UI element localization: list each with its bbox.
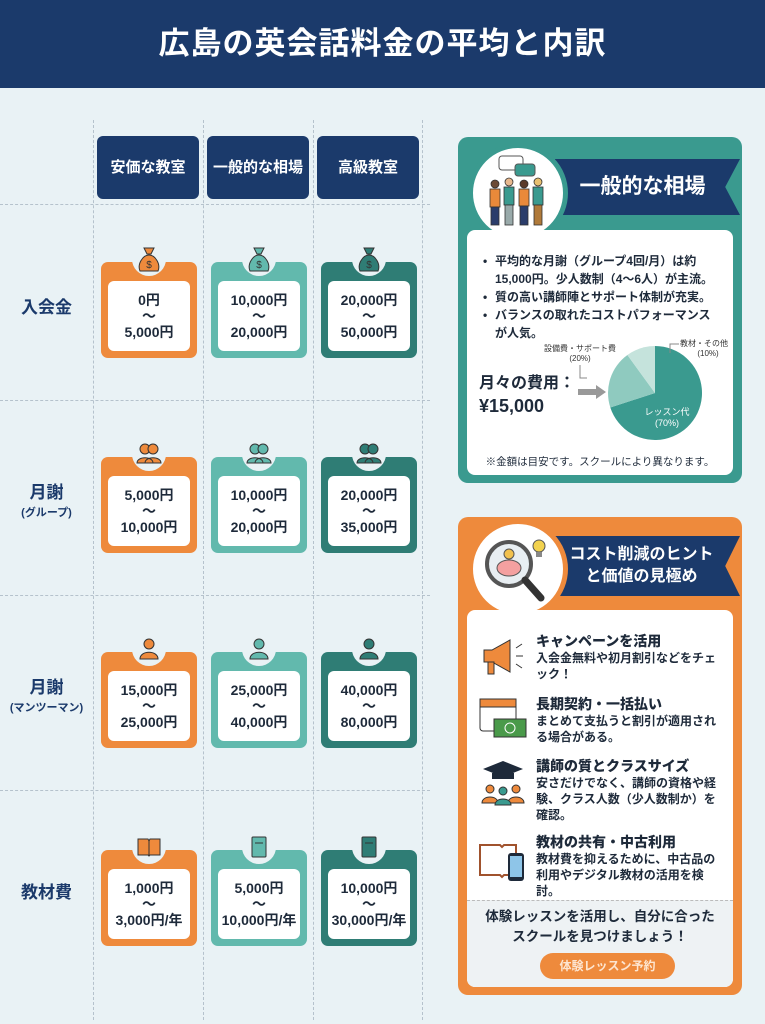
card: admission premium: 〜 (362, 308, 376, 324)
card: admission budget: 〜 (142, 308, 156, 324)
card: materials budget (101, 850, 197, 946)
card: group average: 〜 (252, 503, 266, 519)
bullet list: 15,000円。少人数制（4〜6人）が主流。 (495, 272, 713, 286)
icon: graduation and people (482, 761, 524, 806)
card: materials average: 〜 (252, 896, 266, 912)
monthly cost: ¥15,000 (479, 396, 544, 416)
bullet list: 質の高い講師陣とサポート体制が充実。 (495, 290, 711, 304)
banner: average (555, 159, 740, 215)
tip: long term (480, 696, 716, 744)
row label: group: (グループ) (21, 507, 72, 519)
row label: private: 月謝 (30, 678, 64, 697)
card: private budget (101, 652, 197, 748)
card: materials budget: 3,000円/年 (116, 912, 182, 928)
card: admission average: 〜 (252, 308, 266, 324)
title: 広島の英会話料金の平均と内訳 (158, 26, 606, 61)
panel: average market (458, 137, 742, 483)
row label: group: 月謝 (30, 483, 64, 502)
card: group average: 20,000円 (231, 519, 287, 535)
card: group premium: 〜 (362, 503, 376, 519)
tip: long term: 長期契約・一括払い (536, 696, 662, 712)
tip: materials sharing: 教材の共有・中古利用 (536, 834, 676, 850)
card: materials premium (321, 850, 417, 946)
card: admission premium: $ (366, 260, 372, 271)
tip: teacher quality: 安さだけでなく、講師の資格や経験、クラス人数（少人数制か）を確認。 (536, 776, 716, 822)
bullet list: 平均的な月謝（グループ4回/月）は約 (495, 254, 696, 268)
header: premium: 高級教室 (338, 159, 398, 176)
icon: megaphone (484, 639, 523, 674)
title (0, 0, 765, 88)
call to action area (467, 900, 733, 987)
card: group budget: 〜 (142, 503, 156, 519)
white content box (467, 610, 733, 987)
card: group budget: 5,000円 (124, 487, 174, 503)
tip: teacher quality: 講師の質とクラスサイズ (536, 758, 689, 774)
card: admission average: 20,000円 (231, 324, 287, 340)
banner: tips (555, 536, 740, 596)
icon: book and tablet (479, 844, 524, 881)
card: materials premium: 10,000円 (341, 880, 397, 896)
card: private budget: 〜 (142, 698, 156, 714)
card: admission premium: 20,000円 (341, 292, 397, 308)
icon: people talking (468, 143, 568, 243)
row label: materials: 教材費 (21, 883, 72, 902)
bullet list: バランスの取れたコストパフォーマンス (495, 308, 711, 322)
call to action area: スクールを見つけましょう！ (512, 929, 688, 944)
banner: average: 一般的な相場 (580, 175, 706, 198)
card: admission budget (101, 262, 197, 358)
pie chart: (20%) (569, 354, 591, 363)
card: private average (211, 652, 307, 748)
card: admission premium (321, 262, 417, 358)
card: group premium: 20,000円 (341, 487, 397, 503)
card: admission average: 10,000円 (231, 292, 287, 308)
card: admission average (211, 262, 307, 358)
card: private average: 〜 (252, 698, 266, 714)
tip: long term: まとめて支払うと割引が適用される場合がある。 (536, 714, 716, 744)
bullet list (483, 254, 713, 340)
row label: admission: 入会金 (21, 298, 72, 317)
header: average (207, 136, 309, 199)
icon: calendar and cash (480, 698, 526, 738)
card: admission average: $ (256, 260, 262, 271)
card: admission budget: $ (146, 260, 152, 271)
monthly cost (479, 374, 575, 416)
card: group premium: 35,000円 (341, 519, 397, 535)
pie chart: 教材・その他 (680, 338, 728, 348)
pie chart: レッスン代 (644, 407, 690, 417)
header: budget: 安価な教室 (110, 159, 186, 176)
card: materials premium: 30,000円/年 (332, 912, 406, 928)
button (540, 953, 675, 979)
arrow (578, 385, 606, 399)
pie chart: 設備費・サポート費 (544, 343, 616, 353)
card: private average: 40,000円 (231, 714, 287, 730)
row label: private (10, 678, 83, 714)
banner: tips: と価値の見極め (585, 568, 698, 585)
card: admission budget: 5,000円 (124, 324, 174, 340)
card: materials average (211, 850, 307, 946)
bullet list: が人気。 (495, 326, 543, 340)
icon: magnifier piggy bank (468, 519, 568, 619)
card: group budget: 10,000円 (121, 519, 177, 535)
card: private premium: 40,000円 (341, 682, 397, 698)
header: premium (317, 136, 419, 199)
pie chart: (70%) (655, 418, 679, 428)
row label: private: (マンツーマン) (10, 702, 83, 714)
card: group premium (321, 457, 417, 553)
tip: teacher quality (482, 758, 716, 822)
card: admission budget: 0円 (138, 292, 160, 308)
tip: materials sharing: 教材費を抑えるために、中古品の利用やデジタル教材の活用を検討。 (536, 852, 715, 898)
card: admission premium: 50,000円 (341, 324, 397, 340)
row label: group (21, 483, 72, 519)
tip: materials sharing (479, 834, 715, 898)
pie chart: (10%) (697, 349, 719, 358)
card: materials premium: 〜 (362, 896, 376, 912)
header: budget (97, 136, 199, 199)
card: materials budget: 〜 (142, 896, 156, 912)
call to action area: 体験レッスンを活用し、自分に合った (485, 909, 715, 924)
card: private average: 25,000円 (231, 682, 287, 698)
card: private budget: 15,000円 (121, 682, 177, 698)
tip: campaign: キャンペーンを活用 (536, 633, 661, 649)
tip: campaign (484, 633, 716, 681)
header: average: 一般的な相場 (213, 159, 303, 176)
panel: cost saving tips (458, 517, 742, 995)
card: group average (211, 457, 307, 553)
button: 体験レッスン予約 (559, 959, 656, 973)
note: ※金額は目安です。スクールにより異なります。 (486, 456, 714, 468)
card: private premium: 80,000円 (341, 714, 397, 730)
card: materials average: 10,000円/年 (222, 912, 296, 928)
banner: tips: コスト削減のヒント (569, 546, 714, 563)
white content box (467, 230, 733, 475)
card: private premium (321, 652, 417, 748)
monthly cost: 月々の費用： (479, 375, 575, 392)
tip: campaign: 入会金無料や初月割引などをチェック！ (536, 651, 716, 681)
card: private premium: 〜 (362, 698, 376, 714)
card: group budget (101, 457, 197, 553)
card: group average: 10,000円 (231, 487, 287, 503)
card: materials average: 5,000円 (234, 880, 284, 896)
card: materials budget: 1,000円 (124, 880, 174, 896)
card: private budget: 25,000円 (121, 714, 177, 730)
pie chart (544, 338, 728, 440)
